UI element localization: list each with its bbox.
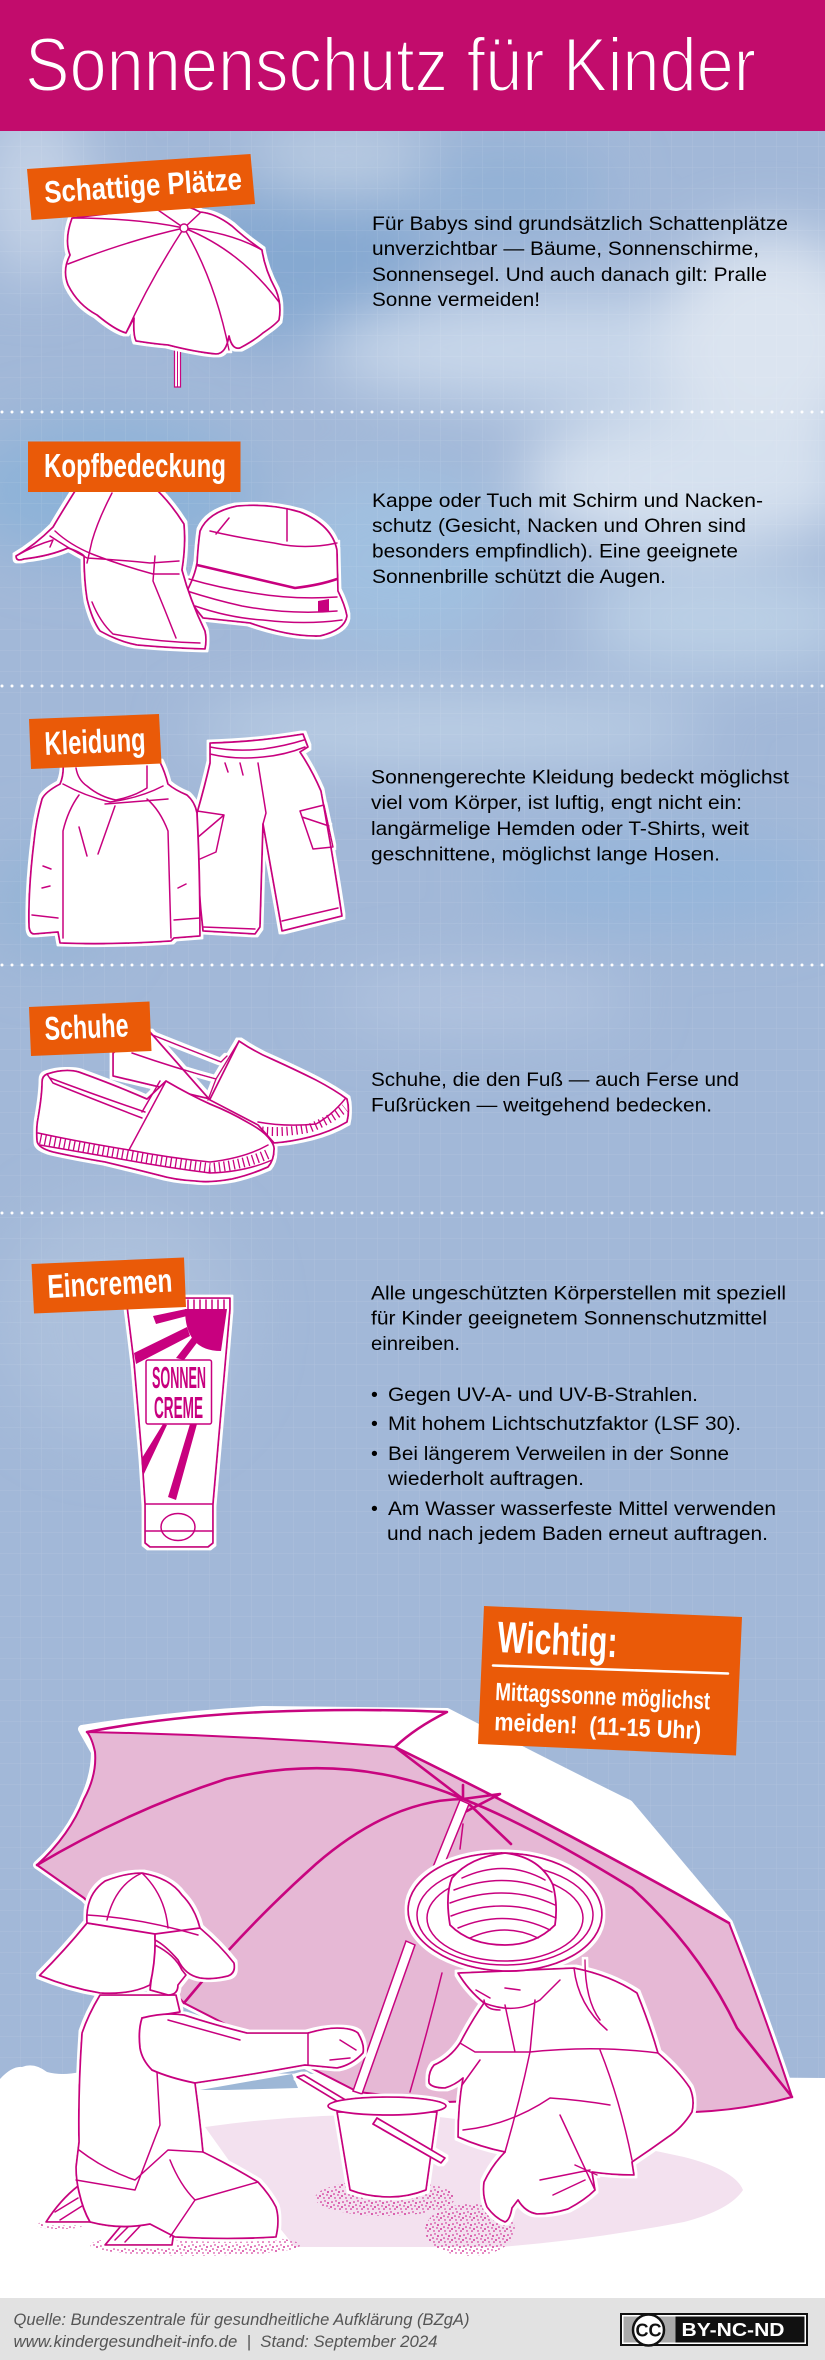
straw hat xyxy=(406,1850,604,1974)
icon: back shoe xyxy=(113,1032,348,1143)
dotted dividers xyxy=(2,412,825,1213)
text: Schuhe: Fußrücken — weitgehend bedecken. xyxy=(371,1094,712,1116)
bullet list: wiederholt auftragen. xyxy=(387,1468,584,1490)
tag: Schattige Plätze: Schattige Plätze xyxy=(43,161,243,210)
panel: Kopfbedeckung xyxy=(16,442,763,649)
tube label: CREME xyxy=(154,1390,203,1425)
text: Kopfbedeckung xyxy=(372,490,763,588)
tag: Kleidung: Kleidung xyxy=(44,721,146,762)
icon: hats xyxy=(16,491,347,649)
text: Kleidung: langärmelige Hemden oder T-Shirts, weit xyxy=(371,818,750,840)
sun cap xyxy=(40,1873,234,1993)
text: Eincremen intro xyxy=(371,1282,786,1355)
icon: espadrilles xyxy=(37,1032,349,1182)
panel: Eincremen xyxy=(32,1258,786,1547)
text: Schuhe xyxy=(371,1069,739,1116)
text: Kleidung: Sonnengerechte Kleidung bedeckt möglichst xyxy=(371,766,790,788)
icon: hooded shirt xyxy=(29,762,200,944)
text: Kopfbedeckung: Sonnenbrille schützt die Augen. xyxy=(372,566,666,588)
icon: front shoe xyxy=(37,1070,274,1182)
source text xyxy=(14,2310,470,2351)
tag: Kleidung xyxy=(29,714,162,769)
sand shadow xyxy=(205,2114,743,2247)
tag: Eincremen: Eincremen xyxy=(46,1261,173,1305)
text: Eincremen intro: Alle ungeschützten Körperstellen mit speziell xyxy=(371,1282,786,1304)
icon: bucket hat xyxy=(187,505,347,636)
bullet list: • xyxy=(371,1384,378,1406)
licence badge: CC BY-NC-ND: BY-NC-ND xyxy=(682,2320,784,2340)
icon: clothing xyxy=(29,734,342,944)
text: Schattige Plätze: Sonne vermeiden! xyxy=(372,289,540,311)
icon: sunscreen tube xyxy=(126,1298,230,1547)
bullet list: und nach jedem Baden erneut auftragen. xyxy=(387,1523,768,1545)
licence badge: CC BY-NC-ND xyxy=(620,2313,808,2346)
sky patches between arm and umbrella xyxy=(187,2015,298,2090)
text: Schattige Plätze: Sonnensegel. Und auch danach gilt: Pralle xyxy=(372,264,767,286)
panel: Schuhe xyxy=(29,1002,739,1182)
tag: Kopfbedeckung xyxy=(28,442,240,492)
tag: Kopfbedeckung: Kopfbedeckung xyxy=(44,447,226,484)
callout: Wichtig: Wichtig: xyxy=(497,1613,619,1667)
bullet list: Gegen UV-A- und UV-B-Strahlen. xyxy=(388,1384,698,1406)
bullet list: • xyxy=(371,1443,378,1465)
scene: children under beach umbrella xyxy=(0,1710,825,2298)
text: Schattige Plätze: Für Babys sind grundsätzlich Schattenplätze xyxy=(372,213,788,235)
face xyxy=(150,1945,186,1995)
shoes xyxy=(46,2186,178,2245)
text: Kopfbedeckung: schutz (Gesicht, Nacken und Ohren sind xyxy=(372,515,746,537)
tube label xyxy=(146,1360,212,1425)
text: Eincremen intro: einreiben. xyxy=(371,1333,460,1355)
child with straw hat xyxy=(406,1850,693,2222)
text: Schuhe: Schuhe, die den Fuß — auch Ferse und xyxy=(371,1069,739,1091)
tag: Schuhe: Schuhe xyxy=(44,1006,129,1047)
source text: www.kindergesundheit-info.de | Stand: September 2024 xyxy=(14,2332,438,2351)
text: Schattige Plätze: unverzichtbar — Bäume, Sonnenschirme, xyxy=(372,238,759,260)
icon: cap with neck flap xyxy=(16,491,206,649)
callout: Wichtig xyxy=(478,1606,742,1756)
bullet list: • xyxy=(371,1498,378,1520)
callout: Wichtig: meiden! (11-15 Uhr) xyxy=(494,1708,702,1745)
icon: sunscreen tube: SONNEN xyxy=(152,1360,206,1395)
bullet list: • xyxy=(371,1413,378,1435)
tag: Schattige Plätze xyxy=(27,154,255,220)
bullet list: Bei längerem Verweilen in der Sonne xyxy=(388,1443,729,1465)
text: Kopfbedeckung: besonders empfindlich). Eine geeignete xyxy=(372,540,738,562)
child with sun cap xyxy=(40,1873,363,2245)
text: Kopfbedeckung: Kappe oder Tuch mit Schirm und Nacken- xyxy=(372,490,763,512)
text: Schattige Plätze xyxy=(372,213,788,311)
bullet list: Am Wasser wasserfeste Mittel verwenden xyxy=(388,1498,776,1520)
icon: parasol xyxy=(65,206,280,387)
text: Kleidung: viel vom Körper, ist luftig, engt nicht ein: xyxy=(371,792,742,814)
bullet list: Mit hohem Lichtschutzfaktor (LSF 30). xyxy=(388,1413,741,1435)
umbrella xyxy=(37,1710,792,2112)
icon: trousers xyxy=(197,734,342,934)
source text: Quelle: Bundeszentrale für gesundheitliche Aufklärung (BZgA) xyxy=(14,2310,470,2329)
bullet list xyxy=(371,1384,776,1545)
ground: white sand xyxy=(0,2065,825,2298)
text: Kleidung xyxy=(371,766,790,866)
title banner xyxy=(0,0,825,131)
text: Eincremen intro: für Kinder geeignetem Sonnenschutzmittel xyxy=(371,1308,767,1330)
panel: Kleidung xyxy=(29,714,790,944)
tag: Schuhe xyxy=(29,1002,152,1056)
callout: Wichtig: Mittagssonne möglichst xyxy=(495,1678,711,1715)
tag: Eincremen xyxy=(32,1258,186,1314)
sand stipple xyxy=(36,2180,515,2256)
text: Kleidung: geschnittene, möglichst lange Hosen. xyxy=(371,844,720,866)
licence badge: CC BY-NC-ND: CC xyxy=(636,2320,662,2340)
footer xyxy=(0,2298,825,2360)
panel: Schattige Plätze xyxy=(27,154,788,387)
bucket and shovel xyxy=(297,2075,446,2197)
